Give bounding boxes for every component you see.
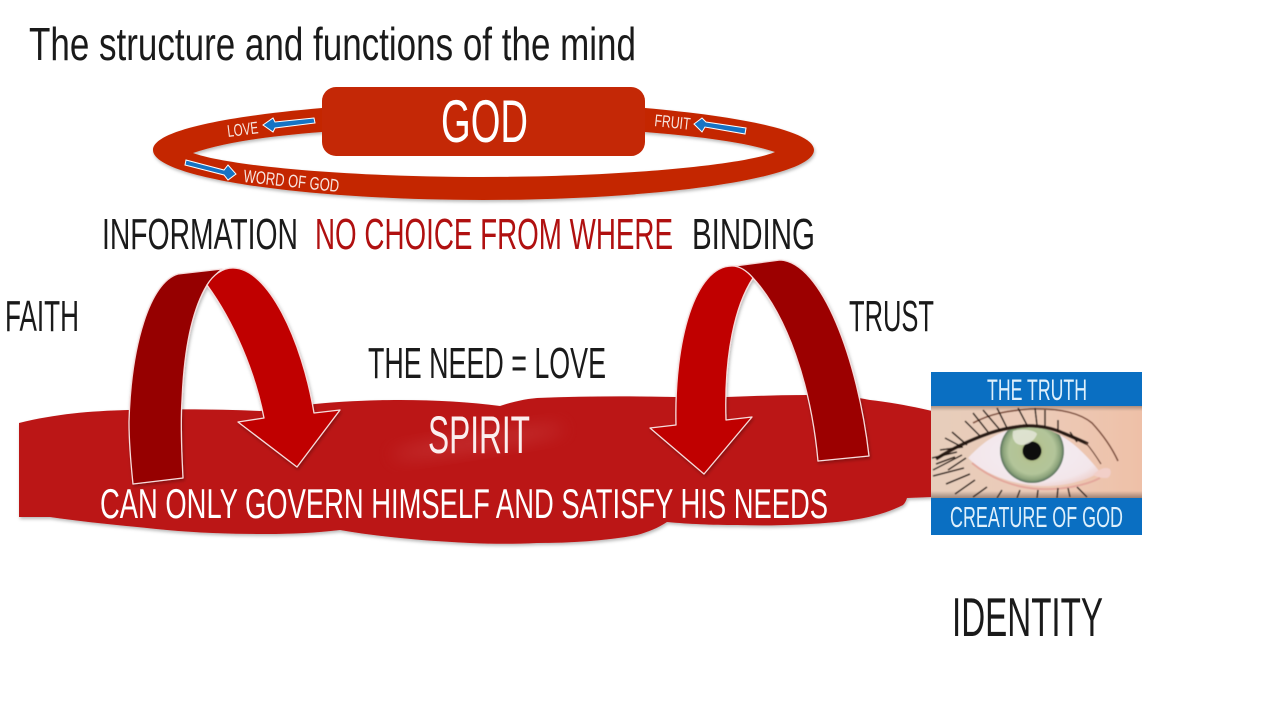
word of god label: WORD OF GOD <box>243 166 340 196</box>
upper lash band <box>936 426 1088 459</box>
eye photo skin <box>931 406 1142 498</box>
word arrow <box>185 160 236 180</box>
spirit highlight <box>390 422 566 462</box>
trust label: TRUST <box>849 292 934 341</box>
fruit arrow <box>694 118 746 134</box>
eye panel <box>928 372 1146 535</box>
faith label: FAITH <box>5 292 79 341</box>
outer lid line <box>1086 443 1101 464</box>
iris <box>1000 419 1064 483</box>
god box <box>322 87 645 156</box>
love arrow <box>263 118 315 132</box>
banner shadow top <box>931 406 1142 410</box>
left curved arrow <box>129 268 340 484</box>
right curved arrow <box>650 260 869 474</box>
top banner <box>931 372 1142 406</box>
bottom banner <box>931 498 1142 535</box>
title: The structure and functions of the mind <box>29 18 636 70</box>
spirit label: SPIRIT <box>428 406 530 465</box>
eye photo <box>931 406 1142 498</box>
catchlight <box>1013 430 1037 445</box>
identity label: IDENTITY <box>952 586 1103 648</box>
right arrow bright head <box>650 266 753 474</box>
spirit cloud <box>19 395 932 544</box>
lower lid rim <box>972 463 1100 489</box>
fruit label: FRUIT <box>654 111 691 134</box>
orbit ring <box>153 108 814 200</box>
love label: LOVE <box>226 118 259 141</box>
left arrow bright head <box>207 268 340 467</box>
the need label: THE NEED = LOVE <box>368 339 606 388</box>
the truth label: THE TRUTH <box>987 374 1087 407</box>
right arrow dark band <box>735 260 869 461</box>
binding label: BINDING <box>692 210 815 259</box>
tear duct <box>1093 468 1111 478</box>
can only govern label: CAN ONLY GOVERN HIMSELF AND SATISFY HIS NEEDS <box>100 480 828 527</box>
no choice from where label: NO CHOICE FROM WHERE <box>315 210 673 259</box>
upper lid crease <box>973 409 1118 461</box>
left arrow dark band <box>129 269 222 484</box>
god label: GOD <box>441 88 528 155</box>
diagram: god ring <box>153 87 814 200</box>
banner shadow bottom <box>931 492 1142 498</box>
information label: INFORMATION <box>102 210 298 259</box>
eye white <box>968 427 1100 486</box>
lashes <box>932 408 1087 498</box>
pupil <box>1022 442 1042 460</box>
infographic canvas <box>7 26 1142 636</box>
creature of god label: CREATURE OF GOD <box>950 502 1123 534</box>
